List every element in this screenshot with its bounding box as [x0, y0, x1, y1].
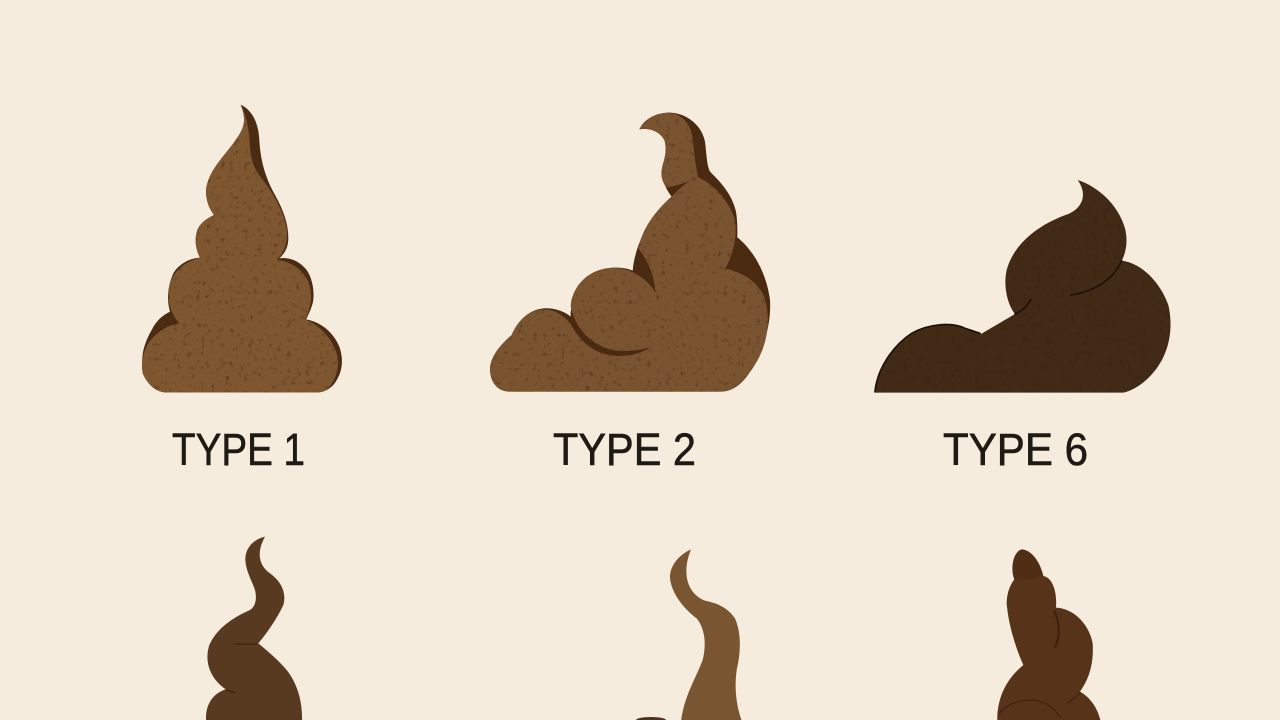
label: type 6: TYPE 6	[943, 424, 1088, 475]
shape: type 2	[490, 113, 770, 392]
front: top curl	[639, 113, 698, 187]
label: type 2: TYPE 2	[553, 424, 696, 475]
darker tip	[1012, 549, 1043, 579]
shape: type 1	[142, 105, 342, 392]
front: pear body	[638, 177, 736, 292]
small dark top of lower shape	[636, 717, 666, 720]
front: lower body and left lobe	[490, 267, 768, 392]
shape: type 6	[874, 180, 1171, 393]
shadow silhouette	[490, 113, 770, 392]
shape: bottom right	[997, 549, 1101, 720]
seams	[226, 644, 257, 693]
label: type 1: TYPE 1	[172, 424, 305, 475]
shape: bottom left	[206, 537, 302, 720]
front: middle ball	[571, 268, 693, 351]
seams	[999, 612, 1080, 717]
seams and edge lines	[875, 261, 1122, 392]
shape: bottom middle	[670, 549, 742, 720]
